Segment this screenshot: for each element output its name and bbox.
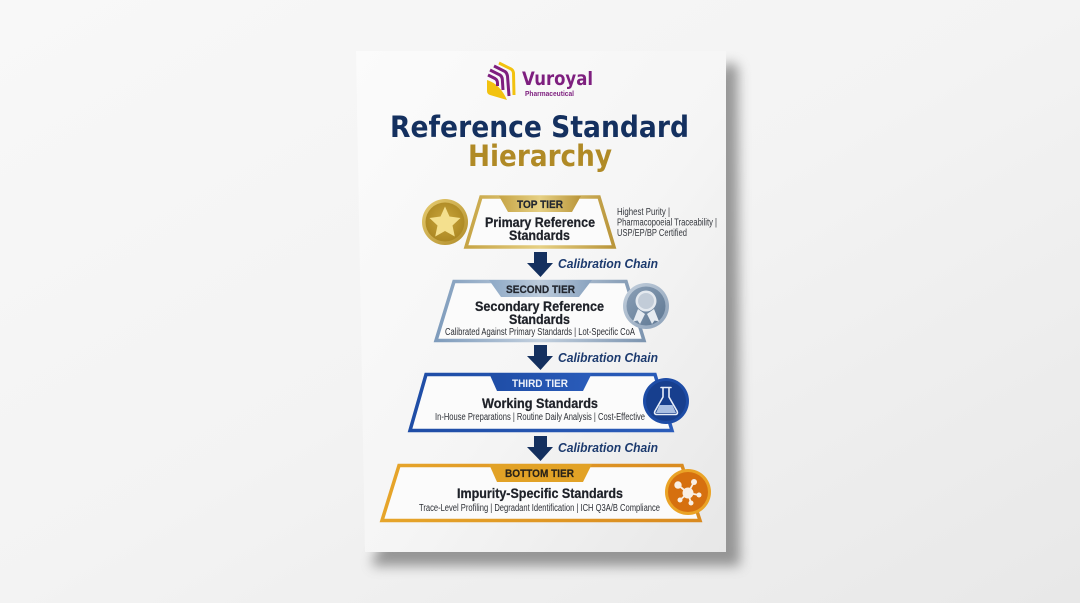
logo name: Vuroyal xyxy=(522,68,593,90)
tier description xyxy=(617,207,717,239)
logo xyxy=(487,63,593,100)
tier heading xyxy=(485,215,595,243)
title line 2: Hierarchy xyxy=(468,139,612,173)
tier heading: Working Standards xyxy=(482,396,598,411)
poster sheet xyxy=(356,51,726,552)
tier description: Highest Purity | xyxy=(617,207,670,218)
icon: molecule network xyxy=(665,469,711,515)
tier label: THIRD TIER xyxy=(512,378,568,390)
trapezoid frame xyxy=(410,374,672,430)
panel: third tier xyxy=(410,373,689,430)
icon: silver medal xyxy=(623,283,669,329)
arrow label 1: Calibration Chain xyxy=(558,256,658,271)
tier description: USP/EP/BP Certified xyxy=(617,228,687,239)
title line 1: Reference Standard xyxy=(390,110,689,144)
tier tab xyxy=(489,464,592,482)
logo mark xyxy=(487,63,514,100)
tier description: Trace-Level Profiling | Degradant Identification | ICH Q3A/B Compliance xyxy=(419,503,660,514)
trapezoid frame xyxy=(382,466,700,520)
trapezoid frame xyxy=(466,197,614,247)
arrow label 2: Calibration Chain xyxy=(558,350,658,365)
tier heading: Standards xyxy=(509,312,570,327)
title xyxy=(390,110,689,173)
tier label: SECOND TIER xyxy=(506,284,575,296)
tier tab xyxy=(489,280,592,297)
arrow: calibration 3 xyxy=(527,436,553,461)
tier heading: Impurity-Specific Standards xyxy=(457,486,623,501)
panel: top tier xyxy=(422,196,717,247)
tier heading: Secondary Reference xyxy=(475,299,604,314)
arrow: calibration 2 xyxy=(527,345,553,370)
tier heading: Primary Reference xyxy=(485,215,595,230)
icon: star coin xyxy=(422,199,468,245)
arrow: calibration 1 xyxy=(527,252,553,277)
arrow label 3: Calibration Chain xyxy=(558,440,658,455)
tier label: BOTTOM TIER xyxy=(505,468,574,480)
tier tab xyxy=(489,373,592,391)
tier heading: Standards xyxy=(509,228,570,243)
trapezoid frame xyxy=(436,282,644,340)
tier description: Calibrated Against Primary Standards | Lot-Specific CoA xyxy=(445,327,635,338)
tier heading xyxy=(475,299,604,327)
poster shadow xyxy=(372,62,740,566)
tier tab xyxy=(499,196,581,212)
panel: second tier xyxy=(436,280,669,340)
logo tagline: Pharmaceutical xyxy=(525,89,574,98)
tier description: Pharmacopoeial Traceability | xyxy=(617,218,717,228)
panel: bottom tier xyxy=(382,464,711,520)
tier label: TOP TIER xyxy=(517,199,563,211)
icon: flask xyxy=(643,378,689,424)
tier description: In-House Preparations | Routine Daily Analysis | Cost-Effective xyxy=(435,412,645,423)
